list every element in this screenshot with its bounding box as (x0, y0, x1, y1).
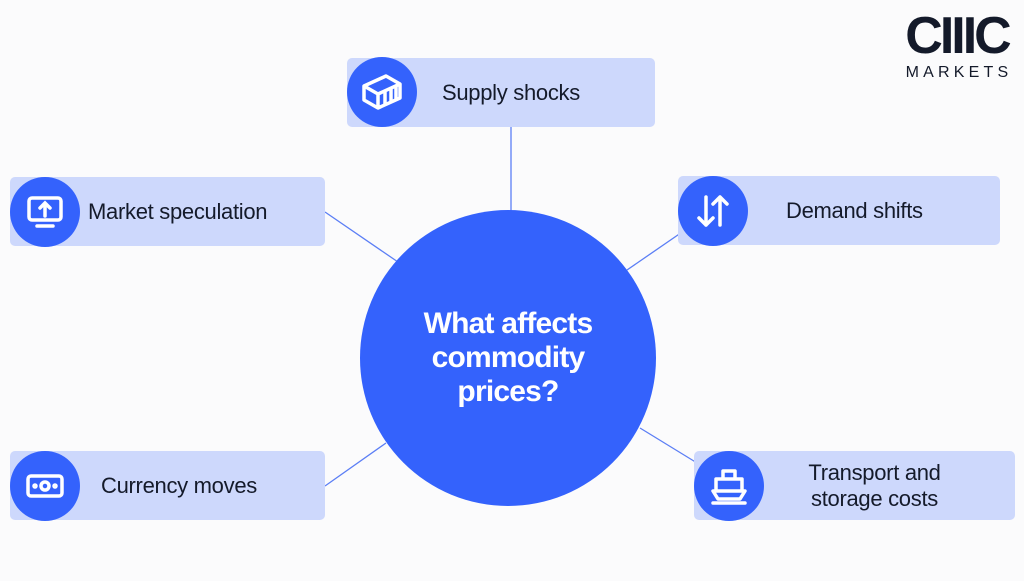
icon: banknote (10, 451, 80, 521)
center circle: What affects (424, 307, 592, 340)
panel: demand shifts: Demand shifts (786, 198, 923, 222)
center circle: commodity (432, 341, 584, 374)
logo: CIIIC (905, 7, 1009, 65)
panel: supply shocks: Supply shocks (442, 80, 580, 104)
logo: MARKETS (906, 64, 1012, 81)
panel: market speculation (10, 177, 325, 246)
panel: currency moves: Currency moves (101, 472, 257, 498)
panel: transport and storage costs: storage costs (811, 486, 938, 510)
panel: currency moves (10, 451, 325, 520)
panel: transport and storage costs (694, 451, 1015, 520)
icon: monitor (10, 177, 80, 247)
icon: ship (694, 451, 764, 521)
panel: transport and storage costs: Transport and (808, 460, 941, 484)
icon: container (347, 57, 417, 127)
panel: supply shocks (347, 58, 655, 127)
panel: market speculation: Market speculation (88, 198, 267, 224)
panel: demand shifts (678, 176, 1000, 245)
center circle (360, 210, 656, 506)
center circle: prices? (457, 375, 559, 408)
icon: arrows (678, 176, 748, 246)
